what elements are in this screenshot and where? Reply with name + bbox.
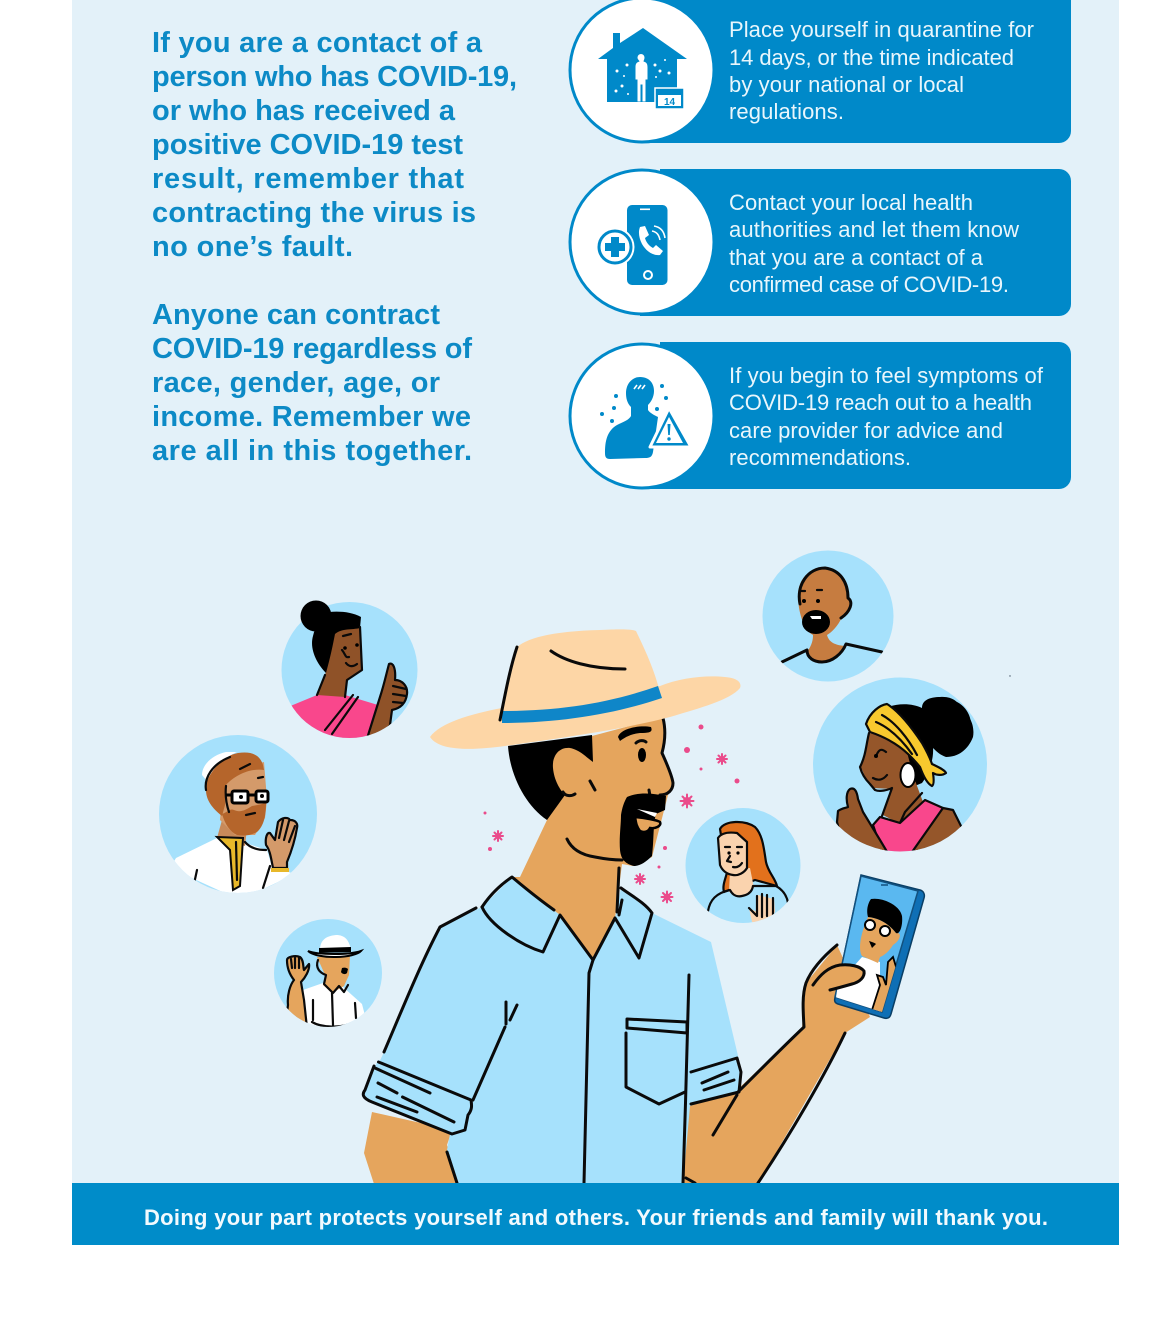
eyebrow and eye xyxy=(618,726,652,741)
step text xyxy=(729,190,1019,297)
shirt outlines xyxy=(363,868,741,1183)
panel: symptoms step xyxy=(570,342,1071,489)
avatar: woman with thumbs up xyxy=(282,600,418,745)
intro text block: positive COVID-19 test xyxy=(152,129,463,161)
step text: care provider for advice and xyxy=(729,418,1003,443)
right arm and hand xyxy=(682,945,870,1184)
avatar: woman with headband xyxy=(813,678,987,862)
jaw line xyxy=(567,839,622,860)
step text: that you are a contact of a xyxy=(729,245,984,270)
ear lines xyxy=(563,781,595,796)
step text: Contact your local health xyxy=(729,190,973,215)
intro text block: result, remember that xyxy=(152,163,464,195)
left sleeve fill xyxy=(364,1060,472,1134)
intro text block xyxy=(152,27,517,263)
icon: phone call with medical cross xyxy=(570,170,714,314)
solidarity text block: race, gender, age, or xyxy=(152,367,440,399)
footer banner: Doing your part protects yourself and others. Your friends and family will thank you. xyxy=(144,1205,1048,1230)
hat xyxy=(430,629,740,749)
avatar: man with glasses and kufi xyxy=(159,735,317,900)
step text: recommendations. xyxy=(729,445,911,470)
icon: house with person and calendar: 14 xyxy=(664,97,675,108)
solidarity text block xyxy=(152,299,472,467)
step text: COVID-19 reach out to a health xyxy=(729,390,1032,415)
goatee and mouth xyxy=(620,794,666,866)
arm outlines xyxy=(686,945,845,1183)
step text: regulations. xyxy=(729,99,844,124)
solidarity text block: income. Remember we xyxy=(152,401,471,433)
illustration: man with hat holding phone xyxy=(363,629,924,1184)
step text: confirmed case of COVID-19. xyxy=(729,272,1009,297)
solidarity text block: are all in this together. xyxy=(152,435,472,467)
on-screen caller xyxy=(836,899,902,1018)
avatar: bald man with beard xyxy=(762,550,894,682)
intro text block: or who has received a xyxy=(152,95,456,127)
step text xyxy=(729,363,1044,470)
solidarity text block: COVID-19 regardless of xyxy=(152,333,472,365)
icon: house with person and calendar xyxy=(570,0,714,142)
solidarity text block: Anyone can contract xyxy=(152,299,440,331)
hat band xyxy=(502,686,662,723)
tiny speck xyxy=(1009,675,1011,677)
step text: authorities and let them know xyxy=(729,217,1019,242)
step text: Place yourself in quarantine for xyxy=(729,17,1034,42)
avatar: woman with red hair xyxy=(686,808,800,925)
hat brim xyxy=(430,676,740,749)
hair bun xyxy=(300,600,332,632)
footer banner xyxy=(72,1183,1119,1245)
intro text block: no one’s fault. xyxy=(152,231,353,263)
avatar: small man in white hat xyxy=(274,919,382,1035)
neck and head skin xyxy=(508,717,673,960)
step text: 14 days, or the time indicated xyxy=(729,45,1014,70)
left arm skin xyxy=(364,1112,460,1184)
panel: quarantine step xyxy=(570,0,1071,143)
virus particles xyxy=(484,724,740,902)
hat crown xyxy=(500,629,662,722)
shirt body xyxy=(364,877,741,1184)
icon: person with warning sign xyxy=(570,344,714,488)
step text xyxy=(729,17,1034,124)
step text: If you begin to feel symptoms of xyxy=(729,363,1044,388)
intro text block: If you are a contact of a xyxy=(152,27,483,59)
intro text block: contracting the virus is xyxy=(152,197,476,229)
step text: by your national or local xyxy=(729,72,964,97)
face outline xyxy=(649,718,673,796)
thumb xyxy=(813,965,864,990)
hair xyxy=(508,735,593,820)
panel: contact authorities step xyxy=(570,169,1071,316)
phone xyxy=(835,875,924,1018)
intro text block: person who has COVID-19, xyxy=(152,61,517,93)
